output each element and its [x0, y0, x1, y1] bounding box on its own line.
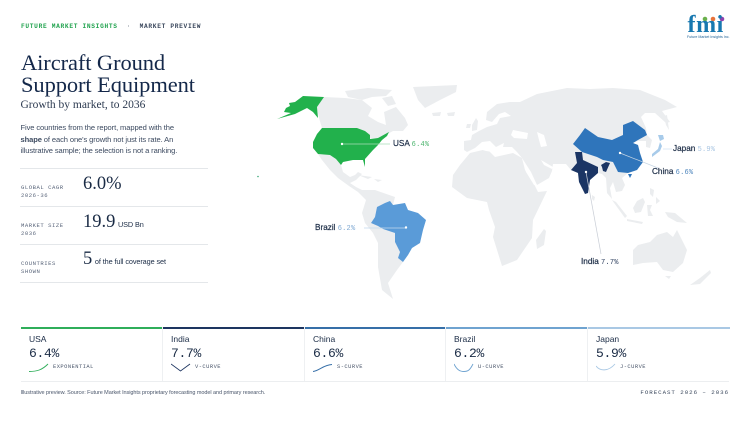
stat value: 6.0%: 6.0%	[83, 174, 122, 194]
China value: 6.6%	[313, 346, 343, 361]
leader lines	[342, 144, 672, 254]
label: Japan: Japan 5.9%	[673, 144, 715, 154]
USA value: 6.4%	[29, 346, 59, 361]
stat: market size	[21, 222, 64, 237]
title: Aircraft Ground	[21, 50, 165, 75]
footer forecast: FORECAST 2026 – 2036	[640, 389, 729, 396]
card: Brazil	[445, 327, 588, 381]
Japan name: Japan	[596, 334, 619, 344]
USA curve label: EXPONENTIAL	[53, 364, 94, 370]
Brazil curve label: U-CURVE	[478, 364, 504, 370]
logo: fmi	[688, 12, 724, 38]
India sparkline	[171, 364, 190, 372]
intro text	[20, 123, 177, 155]
India value: 7.7%	[171, 346, 201, 361]
stat: market size: 2036	[21, 230, 37, 237]
map dots	[341, 143, 621, 229]
China sparkline	[313, 364, 332, 372]
base land masses	[317, 85, 711, 299]
stat: countries shown: COUNTRIES	[21, 260, 56, 266]
label: USA: USA 6.4%	[393, 139, 429, 149]
Japan value: 5.9%	[596, 346, 626, 361]
stat rows	[20, 168, 208, 283]
country: India	[571, 152, 610, 194]
stat: global CAGR: GLOBAL CAGR	[21, 184, 64, 190]
Japan sparkline	[596, 364, 616, 370]
stat: countries shown: SHOWN	[21, 268, 40, 275]
intro text: Five countries from the report, mapped with the	[20, 123, 174, 132]
India name: India	[171, 334, 189, 344]
stat: global CAGR	[21, 184, 64, 199]
country: China	[573, 121, 647, 178]
stat value: 19.9: 19.9 USD Bn	[83, 212, 144, 232]
label: India: India 7.7%	[581, 257, 619, 267]
China curve label: S-CURVE	[337, 364, 363, 370]
card: India	[162, 327, 305, 381]
country: Brazil	[371, 201, 426, 262]
Brazil name: Brazil	[454, 334, 475, 344]
country: Japan	[652, 135, 664, 157]
intro text: illustrative sample; the selection is not a ranking.	[20, 146, 177, 155]
label: Brazil: Brazil 6.2%	[315, 223, 355, 233]
Japan curve label: J-CURVE	[620, 364, 646, 370]
footer source: Illustrative preview. Source: Future Market Insights proprietary forecasting model and primary research.	[20, 390, 265, 396]
header eyebrow: FUTURE MARKET INSIGHTS · MARKET PREVIEW	[21, 23, 201, 30]
USA name: USA	[29, 334, 46, 344]
stat: market size: MARKET SIZE	[21, 222, 64, 228]
India curve label: V-CURVE	[195, 364, 221, 370]
logo: Future Market Insights Inc.	[687, 34, 730, 38]
stat: global CAGR: 2026-36	[21, 192, 48, 199]
subtitle: Growth by market, to 2036	[20, 99, 145, 111]
card: USA	[21, 327, 162, 372]
USA sparkline	[29, 364, 48, 372]
title	[21, 50, 195, 96]
intro text: shape of each one's growth not just its rate. An	[20, 134, 173, 144]
China name: China	[313, 334, 335, 344]
stat: countries shown	[21, 260, 56, 275]
card: China	[304, 327, 447, 381]
country: USA	[257, 96, 389, 177]
stat value: 5: 5 of the full coverage set	[83, 249, 166, 269]
Brazil sparkline	[454, 364, 474, 372]
card: Japan	[587, 327, 730, 381]
title: Support Equipment	[21, 72, 195, 96]
inland seas	[476, 130, 553, 185]
Brazil value: 6.2%	[454, 346, 484, 361]
label: China: China 6.6%	[652, 167, 693, 177]
